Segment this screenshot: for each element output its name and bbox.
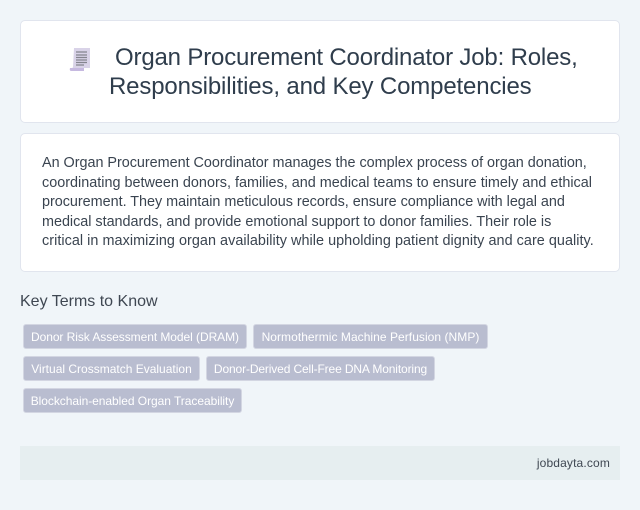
tag: DRAM: [23, 324, 247, 349]
tag: virtual crossmatch: Virtual Crossmatch Evaluation: [31, 362, 192, 376]
panel: description: [20, 133, 620, 272]
tag: virtual crossmatch: [23, 356, 200, 381]
text block: description: An Organ Procurement Coordinator manages the complex process of organ donation,: [42, 155, 587, 171]
title: [109, 44, 578, 100]
tag: NMP: [253, 324, 488, 349]
heading: key terms: Key Terms to Know: [20, 293, 158, 310]
footer: source: jobdayta.com: [537, 456, 610, 470]
title: Responsibilities, and Key Competencies: [109, 73, 532, 100]
title: Organ Procurement Coordinator Job: Roles,: [115, 44, 578, 71]
tag: blockchain: [23, 388, 242, 413]
icon: document scroll: [70, 48, 90, 71]
text block: description: coordinating between donors, families, and medical teams to ensure timely and ethical: [42, 175, 592, 191]
tag: blockchain: Blockchain-enabled Organ Traceability: [31, 394, 234, 408]
footer bar: [20, 446, 620, 480]
tag: DRAM: Donor Risk Assessment Model (DRAM): [31, 330, 239, 344]
panel: title card: [20, 20, 620, 123]
text block: description: [42, 155, 594, 249]
text block: description: medical standards, and provide emotional support to donor families. Their role is: [42, 214, 551, 230]
tag: NMP: Normothermic Machine Perfusion (NMP): [262, 330, 479, 344]
tag: cell-free DNA: Donor-Derived Cell-Free DNA Monitoring: [214, 362, 427, 376]
tag: cell-free DNA: [206, 356, 435, 381]
text block: description: procurement. They maintain meticulous records, ensure compliance with legal and: [42, 194, 565, 210]
text block: description: critical in maximizing organ availability while upholding patient dignity and care quality.: [42, 233, 594, 249]
